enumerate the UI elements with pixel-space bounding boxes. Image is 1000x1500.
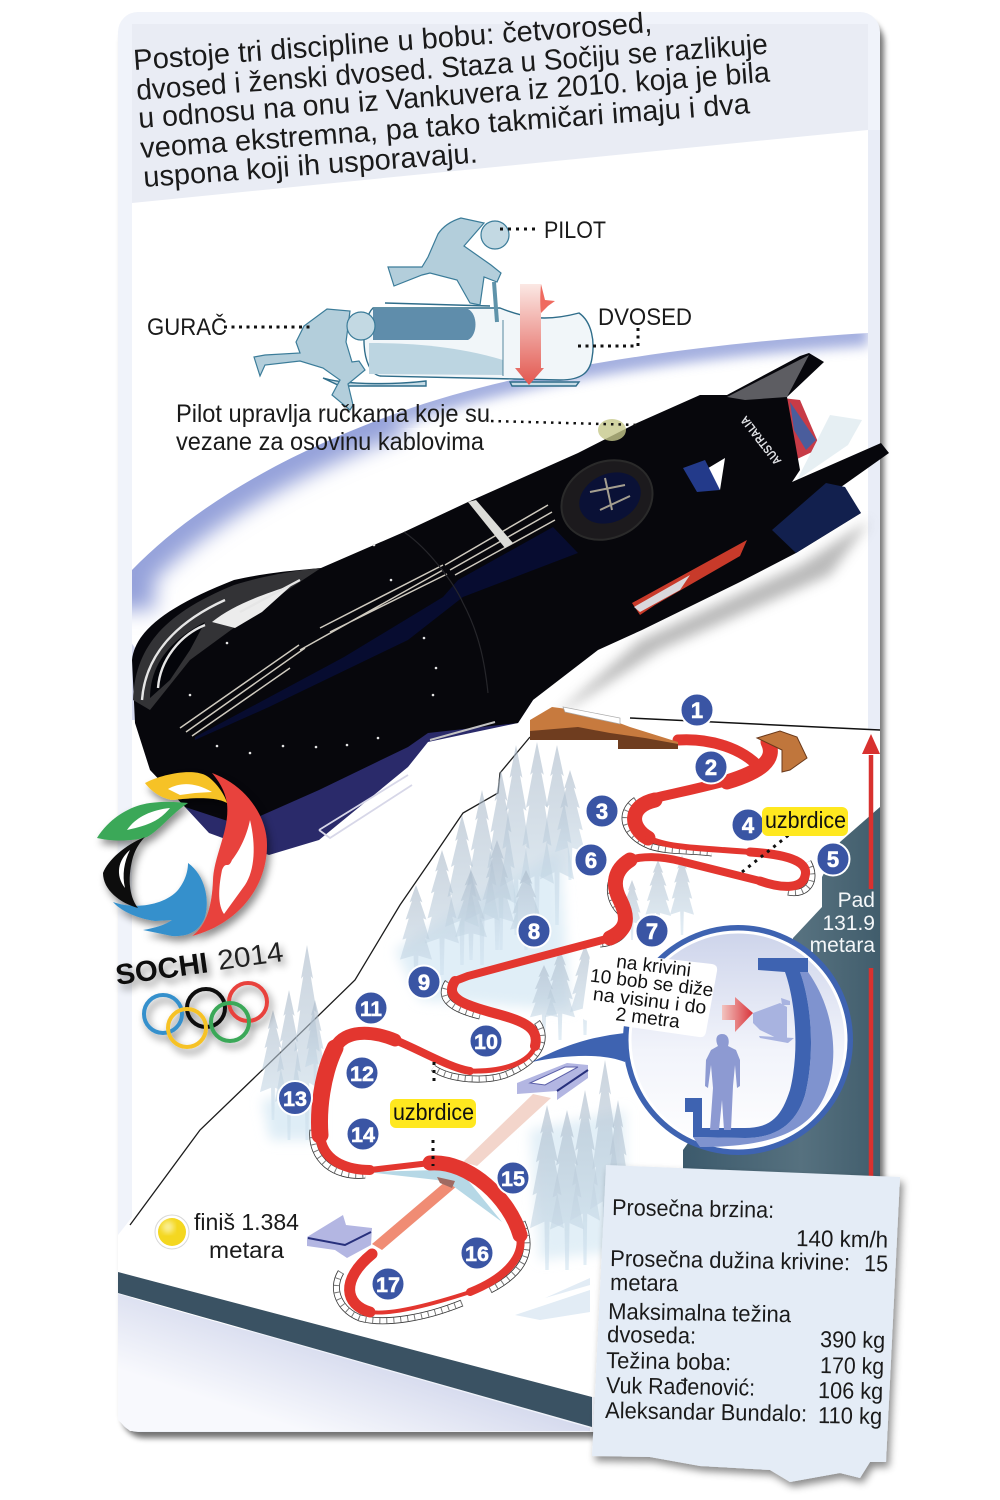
curve numbers: 11 bbox=[360, 998, 382, 1021]
callout: curve note: 2 metra bbox=[614, 1004, 681, 1033]
pilot steering note: Pilot upravlja ručkama koje su bbox=[176, 400, 490, 428]
trees bbox=[260, 742, 694, 1270]
finish label with sun marker: metara bbox=[209, 1237, 284, 1263]
diagram: two-man bobsled with pilot and pusher bbox=[254, 218, 593, 410]
panel: statistics note: 110 kg bbox=[818, 1402, 882, 1429]
callout: curve note: na krivini bbox=[615, 952, 692, 982]
pusher figure bbox=[254, 309, 375, 410]
logo wordmark bbox=[114, 936, 285, 992]
finish label with sun marker: finiš 1.384 bbox=[194, 1209, 299, 1235]
red stripe decal bbox=[632, 540, 747, 615]
curve numbers: 1 bbox=[691, 698, 703, 723]
detail magnifier: curve 10 bbox=[532, 928, 850, 1152]
curve numbers: 8 bbox=[528, 919, 540, 944]
lower runner hull bbox=[185, 700, 533, 855]
hull text mark: AUSTRALIA bbox=[737, 413, 784, 468]
label: pusher: GURAČ bbox=[147, 313, 227, 341]
curve numbers: 6 bbox=[585, 848, 597, 873]
finish building bbox=[307, 1215, 372, 1258]
intro text block: veoma ekstremna, pa tako takmičari imaju i dva bbox=[139, 88, 752, 165]
curve numbers bbox=[278, 694, 850, 1300]
panel: statistics note: 106 kg bbox=[818, 1377, 883, 1404]
panel: statistics note: Težina boba: bbox=[606, 1347, 731, 1375]
intro text block: uspona koji ih usporavaju. bbox=[142, 138, 479, 194]
base slab of terrain bbox=[118, 1272, 592, 1427]
curve numbers: 9 bbox=[418, 970, 430, 995]
olympic rings bbox=[144, 983, 267, 1047]
callout: curve note: 10 bob se diže bbox=[589, 966, 714, 1002]
panel: statistics note: metara bbox=[610, 1269, 679, 1296]
page panel bbox=[118, 12, 884, 1438]
logo: Sochi 2014 flame emblem bbox=[97, 772, 267, 936]
uphill dotted markers bbox=[433, 834, 790, 1166]
mid building bbox=[517, 1063, 588, 1100]
label: two-man sled bbox=[578, 304, 692, 346]
hull reflections bbox=[133, 355, 809, 740]
red force arrow bbox=[515, 284, 544, 385]
panel: statistics note: Maksimalna težina bbox=[608, 1298, 792, 1327]
rivets bbox=[189, 544, 437, 754]
panel: statistics note: Vuk Rađenović: bbox=[606, 1372, 755, 1401]
label: two-man sled: DVOSED bbox=[598, 304, 692, 331]
pilot helmet bbox=[548, 419, 725, 554]
pilot steering note: vezane za osovinu kablovima bbox=[176, 428, 484, 456]
red track bbox=[320, 740, 806, 1313]
ice track backdrop swoosh bbox=[105, 333, 868, 760]
intro text block: Postoje tri discipline u bobu: četvorosed, bbox=[132, 7, 653, 77]
curve numbers: 5 bbox=[827, 847, 839, 872]
uphill label 2: uzbrdice bbox=[393, 1099, 474, 1125]
curve numbers: 15 bbox=[501, 1168, 525, 1191]
intro text block: u odnosu na onu iz Vankuvera iz 2010. koja je bila bbox=[137, 57, 772, 135]
start building bbox=[530, 707, 678, 749]
curve numbers: 16 bbox=[465, 1243, 489, 1266]
callout: curve note bbox=[582, 951, 717, 1037]
hill outline bbox=[130, 737, 530, 1225]
curve numbers: 13 bbox=[283, 1088, 307, 1111]
panel: statistics note: 140 km/h bbox=[796, 1225, 888, 1253]
human silhouette bbox=[705, 1034, 740, 1130]
curve numbers: 3 bbox=[596, 799, 608, 824]
pilot figure bbox=[388, 218, 509, 322]
mini-map ground and track bbox=[118, 707, 880, 1431]
transfer beams bbox=[463, 1094, 551, 1166]
curve numbers: 14 bbox=[351, 1124, 375, 1147]
curve numbers: 10 bbox=[474, 1031, 498, 1054]
header band bbox=[132, 24, 868, 203]
tyre barriers bbox=[313, 800, 812, 1321]
curve numbers: 7 bbox=[646, 919, 658, 944]
bobsled shadow bbox=[550, 520, 870, 720]
drop label: Pad bbox=[838, 889, 875, 912]
pointer wedge bbox=[532, 1033, 625, 1062]
sled body bbox=[323, 303, 593, 386]
panel: statistics note: Prosečna dužina krivine: bbox=[610, 1245, 850, 1275]
uphill label 1: uzbrdice bbox=[765, 807, 846, 833]
icon: yellow sun marker bbox=[155, 1215, 189, 1249]
map ground bbox=[118, 718, 880, 1397]
top ridge line bbox=[630, 718, 880, 730]
panel: statistics note: Prosečna brzina: bbox=[612, 1194, 774, 1223]
panel: statistics note: 170 kg bbox=[820, 1352, 884, 1379]
intro text block bbox=[132, 7, 772, 194]
curve numbers: 2 bbox=[705, 755, 717, 780]
drop label: metara bbox=[810, 934, 875, 957]
label: pilot: PILOT bbox=[544, 217, 606, 244]
label: pilot bbox=[500, 217, 606, 244]
soft shadow under slab bbox=[118, 1294, 590, 1431]
snow patches bbox=[262, 850, 625, 1260]
logo wordmark: 2014 bbox=[216, 936, 285, 976]
drop label: 131.9 bbox=[822, 912, 875, 935]
light wall fill bbox=[693, 972, 833, 1147]
red arrow bbox=[722, 997, 753, 1032]
curve numbers: 4 bbox=[742, 813, 755, 838]
height arrow bbox=[862, 734, 880, 1178]
main black hull bbox=[132, 353, 889, 825]
sled icon bbox=[753, 998, 794, 1043]
panel: statistics note bbox=[592, 1165, 900, 1482]
drop label bbox=[810, 889, 875, 957]
panel: statistics note: Aleksandar Bundalo: bbox=[605, 1397, 807, 1427]
lens bbox=[626, 928, 850, 1152]
white band on hull bbox=[468, 500, 513, 548]
curve numbers: 12 bbox=[350, 1063, 374, 1086]
drop height cliff bbox=[683, 807, 880, 1178]
wall cross-section bbox=[685, 958, 811, 1138]
upper junction building bbox=[757, 731, 807, 772]
rear upper cowling and flag bbox=[782, 398, 862, 480]
panel: statistics note: 390 kg bbox=[820, 1326, 885, 1353]
logo wordmark: SOCHI bbox=[114, 947, 210, 992]
callout: curve note: na visinu i do bbox=[592, 984, 708, 1019]
photo-style black bobsled bbox=[132, 353, 889, 855]
rear runner bbox=[772, 483, 861, 553]
panel: statistics note: 15 bbox=[864, 1250, 888, 1276]
pilot steering note bbox=[176, 400, 640, 456]
intro text block: dvosed i ženski dvosed. Staza u Sočiju se razlikuje bbox=[135, 29, 769, 107]
panel: statistics note: dvoseda: bbox=[607, 1321, 696, 1349]
finish label with sun marker bbox=[155, 1209, 299, 1263]
curve numbers: 17 bbox=[376, 1274, 400, 1297]
